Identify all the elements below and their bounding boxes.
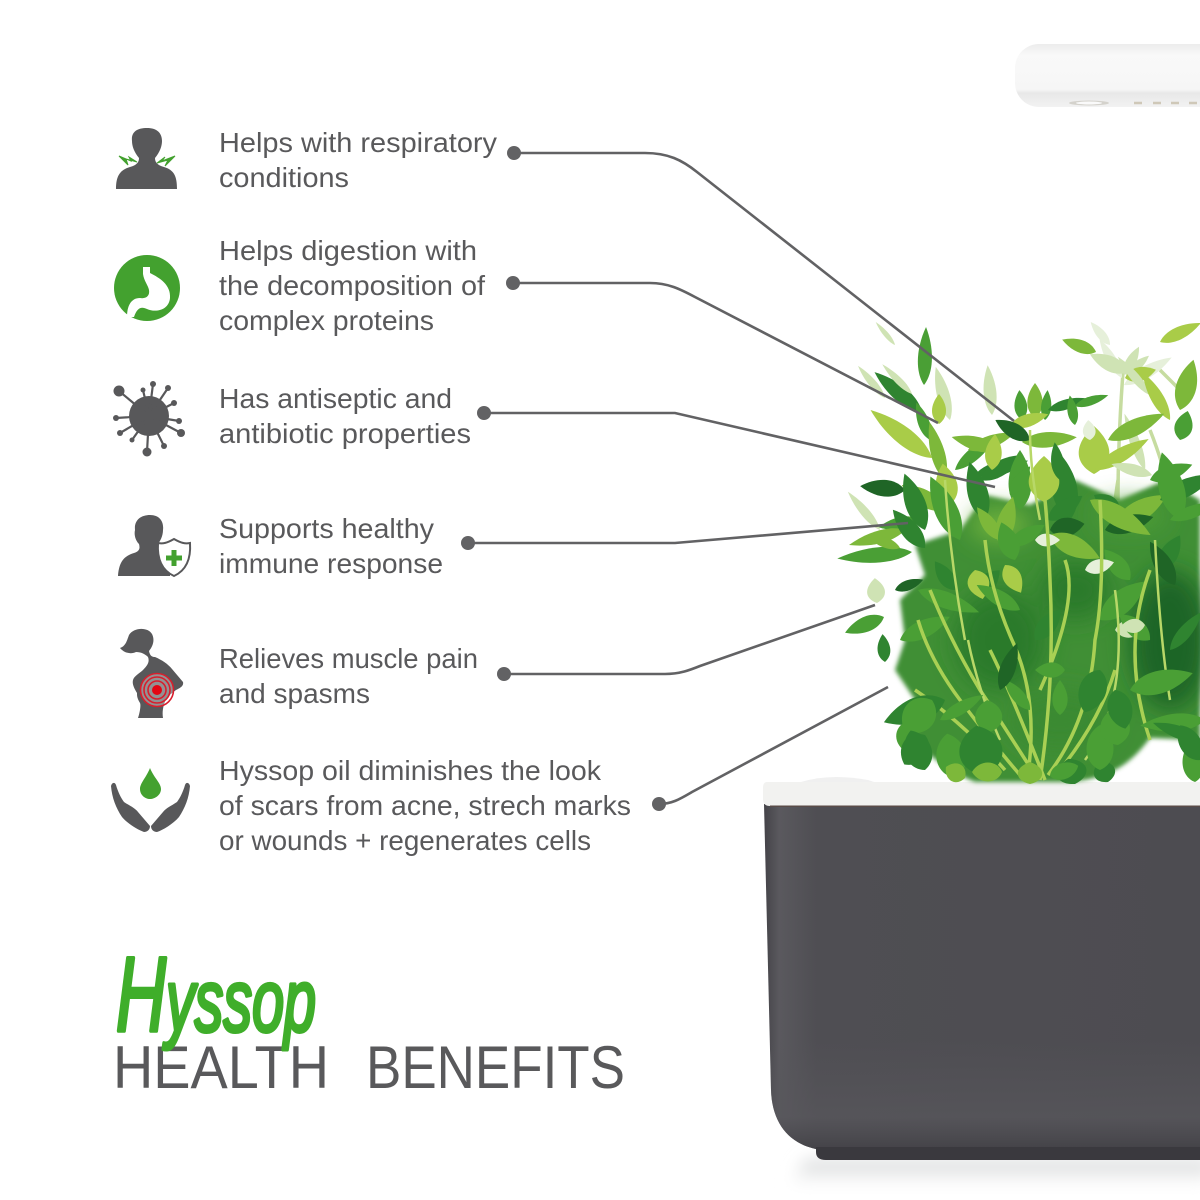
connector lines xyxy=(468,153,1014,804)
benefit text 2: the decomposition of xyxy=(219,270,485,301)
benefit text 6 xyxy=(219,755,631,856)
icon: stomach xyxy=(114,255,180,321)
icon: oil drop in hands xyxy=(111,768,190,832)
shaded foliage patches xyxy=(955,501,1200,750)
benefit text 4: immune response xyxy=(219,548,443,579)
benefit text 6: or wounds + regenerates cells xyxy=(219,825,591,856)
benefit text 6: of scars from acne, strech marks xyxy=(219,790,631,821)
benefit text 3 xyxy=(219,383,471,449)
centre top leaves xyxy=(950,383,1200,539)
connector 6 xyxy=(659,687,888,804)
icon: person with shield xyxy=(118,515,190,576)
planter pot xyxy=(763,777,1200,1185)
benefit text 2 xyxy=(219,235,485,336)
benefit text 5: and spasms xyxy=(219,678,370,709)
dense foliage mass xyxy=(895,480,1200,782)
benefit text 6: Hyssop oil diminishes the look xyxy=(219,755,602,786)
benefit text 2: complex proteins xyxy=(219,305,434,336)
connector 4 xyxy=(468,523,908,543)
lamp head xyxy=(1015,44,1200,107)
benefit text 4 xyxy=(219,513,443,579)
icon: woman with muscle pain xyxy=(120,629,183,718)
title: hyssop script: Hyssop xyxy=(116,936,316,1054)
benefit text 1 xyxy=(219,127,497,193)
benefit text 3: antibiotic properties xyxy=(219,418,471,449)
benefit text 3: Has antiseptic and xyxy=(219,383,452,414)
icon: virus xyxy=(113,381,185,456)
connector 3 xyxy=(484,413,995,487)
lower leaves xyxy=(880,608,1200,788)
hyssop plant xyxy=(837,317,1200,788)
title: health benefits: HEALTH xyxy=(113,1034,329,1101)
upper left leaves xyxy=(837,327,1030,566)
title: health benefits xyxy=(113,1034,625,1101)
benefit text 1: conditions xyxy=(219,162,349,193)
connector 5 xyxy=(504,605,875,674)
connector 1 xyxy=(514,153,1014,421)
connector 2 xyxy=(513,283,938,423)
benefit text 2: Helps digestion with xyxy=(219,235,477,266)
benefit text 5: Relieves muscle pain xyxy=(219,643,478,674)
icon: person respiratory xyxy=(116,128,177,189)
benefit text 1: Helps with respiratory xyxy=(219,127,497,158)
stems xyxy=(915,500,1150,780)
benefit text 5 xyxy=(219,643,478,709)
connector dots xyxy=(461,146,666,811)
title: health benefits: BENEFITS xyxy=(366,1034,625,1101)
benefit text 4: Supports healthy xyxy=(219,513,434,544)
back stems xyxy=(1111,370,1190,640)
middle leaves xyxy=(842,491,1200,663)
back pale leaves xyxy=(844,317,1200,651)
